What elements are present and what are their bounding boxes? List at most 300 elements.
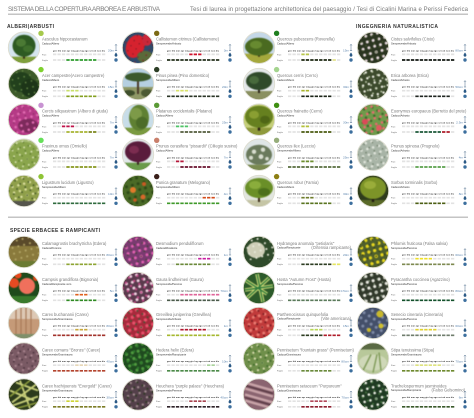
type: Sempreverde/Perenne [277,282,304,286]
phenology chart: gen feb mar apr mag giu lug ago set ott nov dic [288,193,341,196]
card: Heuchera purple palace [111,366,232,418]
phenology chart [391,254,455,266]
phenology chart: Foglie [156,203,163,205]
photo [356,138,390,171]
height icons: 1m [224,324,228,328]
phenology chart [391,121,455,134]
phenology chart [277,254,341,266]
name: Carex comans "Bronze" (Carex) [42,348,101,352]
height icons: 60cm [455,324,463,328]
height icons: 10m [108,192,114,196]
phenology chart [156,156,220,169]
phenology chart: Fiori [156,258,161,261]
card: Stipa tenuissima [357,342,467,374]
phenology chart: Foglie [42,96,49,98]
name: Parthenocissus quinquefolia [277,312,329,317]
phenology chart: Foglie [391,96,398,98]
name: Cercis siliquastrum (Albero di giuda) [42,109,108,114]
height icons: 70cm [341,396,349,400]
phenology chart: gen feb mar apr mag giu lug ago set ott nov dic [53,156,106,159]
phenology chart: gen feb mar apr mag giu lug ago set ott nov dic [288,254,341,257]
card: Quercus cerris [243,67,353,100]
phenology chart: Fiori [156,90,161,93]
name: Sorbus torminalis (Sorbo) [391,180,438,185]
phenology chart: Fiori [391,160,396,163]
photo [8,378,40,410]
phenology chart [277,396,341,409]
phenology chart: Foglie [156,167,163,169]
card: Quercus pubescens [243,31,353,64]
type: Caduco/Albero [277,114,295,118]
card: Acer campestre [8,66,118,100]
phenology chart: gen feb mar apr mag giu lug ago set ott nov dic [167,121,220,124]
height icons: 4m [224,192,228,196]
type: Sempreverde/Arbusto [156,42,182,46]
phenology chart: Fiori [156,125,161,128]
type: Caduco/Arbusto [391,185,410,189]
phenology chart: Fiori [42,364,47,367]
type: Sempreverde/Perenne [391,282,418,286]
phenology chart [391,325,455,337]
phenology chart: Fiori [391,329,396,332]
phenology chart: Foglie [277,371,284,373]
name: Calamagrostis brachytricha (Edera) [42,241,107,246]
photo [346,366,403,418]
phenology chart: gen feb mar apr mag giu lug ago set ott nov dic [53,193,106,196]
name: Punica granatum (Melograno) [156,180,211,185]
name: Fraxinus ornus (Orniello) [42,144,88,149]
dot [38,67,44,72]
phenology chart: Foglie [277,335,284,337]
card: Carex buchananii [8,307,118,339]
title: SISTEMA DELLA COPERTURA ARBOREA E ARBUSTIVA [8,6,161,13]
phenology chart [42,121,106,134]
phenology chart: gen feb mar apr mag giu lug ago set ott nov dic [167,360,220,363]
phenology chart [42,360,106,373]
type: Caduca/Graminacea [277,388,301,392]
photo [356,104,390,136]
phenology chart: gen feb mar apr mag giu lug ago set ott nov dic [402,396,455,399]
phenology chart [156,254,220,266]
name: Heuchera "purple palace" (Heuchera) [156,384,225,388]
card: Parthenocissus quinquefolia [232,294,353,352]
photo [111,259,168,317]
phenology chart [42,49,106,62]
height icons: 30m [343,192,349,196]
dot [274,174,279,179]
name: Quercus cerris (Cerro) [277,73,318,78]
type: Caduco/Albero [42,42,60,46]
card: Gaura lindheimeri [111,259,232,317]
height icons: 80cm [106,324,114,328]
phenology chart: gen feb mar apr mag giu lug ago set ott nov dic [402,121,455,124]
phenology chart [277,86,341,98]
name: Senecio cineraria (Cineraria) [391,312,444,317]
height icons: 7m [110,121,114,125]
phenology chart: Foglie [277,300,284,302]
phenology chart: Fiori [42,90,47,93]
height icons: 60cm [455,253,463,257]
photo [8,138,40,171]
phenology chart: Fiori [277,294,282,297]
name: Quercus frainetto (Cerro) [277,109,323,114]
photo [232,330,289,387]
phenology chart: Foglie [156,335,163,337]
type: Caduca/Perenne [42,246,62,250]
phenology chart: Foglie [42,407,49,409]
card: Ligustrum lucidum [8,174,118,208]
photo [111,294,168,352]
phenology chart: gen feb mar apr mag giu lug ago set ott nov dic [402,156,455,159]
phenology chart: Foglie [391,167,398,169]
phenology chart: Foglie [277,96,284,98]
name: Pinus pinea (Pino domestico) [156,73,210,78]
phenology chart [277,325,341,337]
type: Sempreverde/Graminacea [42,352,73,356]
height icons: 15m [343,324,349,328]
type: Sempreverde/Rampicante [156,352,187,356]
photo [243,175,275,207]
phenology chart: Foglie [277,60,284,62]
phenology chart [277,193,341,205]
phenology chart: Foglie [42,371,49,373]
type: Sempreverde/Albero [277,149,301,153]
dot [154,174,159,179]
card: Aesculus hippocastanum [8,31,118,65]
phenology chart [156,396,220,409]
dot [38,174,44,179]
credits: Tesi di laurea in progettazione architettonica del paesaggio / Tesi di Cicalini Marina e Perissi Federica [190,7,469,13]
phenology chart: Foglie [391,407,398,409]
card: Platanus occidentalis [122,103,232,136]
name: Ligustrum lucidum (Ligustro) [42,180,94,185]
name: Pennisetum "fountain grass" (Pennisetum) [277,348,354,352]
type: Sempreverde/Graminacea [391,352,422,356]
name: Stipa tenuissima (Stipa) [391,348,435,352]
card: Callistemon citrinus [122,30,232,64]
phenology chart: Fiori [277,364,282,367]
height icons: 2.5m [456,121,463,125]
photo [111,366,168,418]
phenology chart: Foglie [391,264,398,266]
height icons: 7m [110,156,114,160]
phenology chart: Fiori [156,400,161,403]
phenology chart: Foglie [391,300,398,302]
phenology chart: Fiori [156,364,161,367]
phenology chart: Foglie [391,371,398,373]
common name: (Falso Gelsomino) [432,387,466,392]
phenology chart [156,325,220,337]
photo [122,174,154,208]
phenology chart: gen feb mar apr mag giu lug ago set ott nov dic [288,156,341,159]
phenology chart: Fiori [391,400,396,403]
type: Caduco/Arbusto [391,114,410,118]
phenology chart: Fiori [391,125,396,128]
phenology chart: gen feb mar apr mag giu lug ago set ott nov dic [167,325,220,328]
type: Caduca/Ricadente [156,246,178,250]
photo [233,228,285,274]
photo [0,228,50,274]
phenology chart: Foglie [42,60,49,62]
card: Phlomis fruticosa [346,223,467,281]
name: Phlomis fruticosa (Falsa salvia) [391,241,448,246]
type: Sempreverde/Perenne [391,246,418,250]
card: Trachelospermum jasminoides [346,366,467,418]
name: Callistemon citrinus (Callistemone) [156,37,220,42]
height icons: 80cm [341,360,349,364]
phenology chart: Fiori [156,294,161,297]
name: Hosta "Autumn Frost" (Hosta) [277,277,332,282]
phenology chart [391,49,455,62]
card: Hosta Autumn Frost [243,272,353,304]
photo [8,307,40,339]
phenology chart: Fiori [391,294,396,297]
card: Desmodium penduliflorum [111,223,232,281]
phenology chart: gen feb mar apr mag giu lug ago set ott nov dic [402,290,455,293]
phenology chart: Fiori [277,400,282,403]
phenology chart: Fiori [391,258,396,261]
phenology chart [391,193,455,205]
card: Prunus cerasifera [122,138,238,171]
height icons: 80cm [106,253,114,257]
phenology chart [277,121,341,134]
phenology chart: Foglie [42,167,49,169]
heading: alberi arbusti: ALBERI|ARBUSTI [7,24,55,30]
phenology chart [42,290,106,302]
photo [243,272,275,304]
phenology chart: Foglie [42,300,49,302]
dot [274,103,279,108]
card: Punica granatum [122,174,232,208]
name: Carex hachijoensis "Evergold" (Carex) [42,384,112,388]
height icons: 20m [343,253,349,257]
phenology chart [156,290,220,302]
photo [243,378,275,410]
card: Calamagrostis brachytricha [0,228,118,274]
height icons: 80cm [455,289,463,293]
name: Quercus robur (Farnia) [277,180,319,185]
type: Caduco/Arbusto [391,149,410,153]
height icons: 15m [108,85,114,89]
height icons: 1m [224,253,228,257]
type: Sempreverde/Perenne [156,282,183,286]
height icons: 15m [343,49,349,53]
phenology chart: Foglie [391,60,398,62]
type: Caduco/Albero [277,78,295,82]
phenology chart: gen feb mar apr mag giu lug ago set ott nov dic [53,86,106,89]
phenology chart [42,156,106,169]
name: Carex buchananii (Carex) [42,312,89,317]
phenology chart: Foglie [277,167,284,169]
phenology chart: Foglie [277,407,284,409]
phenology chart: Fiori [391,53,396,56]
type: Caduca/Rampicante [277,317,301,321]
type: Sempreverde/Rampicante [391,388,422,392]
height icons: 4m [459,156,463,160]
type: Sempreverde/Arbusto [391,42,417,46]
phenology chart: Fiori [277,53,282,56]
card: Fraxinus ornus [8,138,118,171]
photo [0,330,54,387]
phenology chart: Foglie [42,335,49,337]
phenology chart: Fiori [156,53,161,56]
phenology chart: Fiori [277,90,282,93]
phenology chart: gen feb mar apr mag giu lug ago set ott nov dic [288,325,341,328]
card: Euonymus europaeus [356,104,467,136]
photo [122,104,154,136]
type: Sempreverde/Arbusto [156,317,182,321]
phenology chart: Fiori [42,53,47,56]
heading: specie erbacee e rampicanti: SPECIE ERBACEE E RAMPICANTI [10,228,101,234]
phenology chart: Fiori [277,258,282,261]
name: Trachelospermum jasminoides [391,384,447,388]
phenology chart: Foglie [42,203,49,205]
type: Caduco/Albero [277,185,295,189]
phenology chart: Fiori [277,125,282,128]
card: Erica arborea [356,68,467,100]
phenology chart: gen feb mar apr mag giu lug ago set ott nov dic [167,193,220,196]
card: Pyracantha coccinea [346,259,467,317]
phenology chart: gen feb mar apr mag giu lug ago set ott nov dic [402,193,455,196]
photo [122,32,154,64]
phenology chart [391,156,455,169]
phenology chart: gen feb mar apr mag giu lug ago set ott nov dic [53,49,106,52]
dot [154,31,159,36]
common name: (Ortensia rampicante) [311,245,352,250]
phenology chart [391,290,455,302]
dot [154,67,159,72]
photo [356,32,390,64]
card: Quercus frainetto [243,103,353,136]
phenology chart: gen feb mar apr mag giu lug ago set ott nov dic [288,49,341,52]
height icons: 80cm [455,49,463,53]
type: Caduca/Rampicante [277,246,301,250]
card: Quercus ilex [243,138,353,171]
dot [38,103,44,108]
height icons: 7m [224,156,228,160]
card: Cercis siliquastrum [8,102,118,136]
phenology chart: gen feb mar apr mag giu lug ago set ott nov dic [167,156,220,159]
height icons: 3m [224,49,228,53]
phenology chart [156,86,220,98]
type: Caduco/Albero [277,42,295,46]
phenology chart: Fiori [42,197,47,200]
name: Platanus occidentalis (Platano) [156,109,213,114]
phenology chart: Foglie [42,132,49,134]
phenology chart: Foglie [391,132,398,134]
type: Caduca/Graminacea [277,352,301,356]
photo [8,68,40,100]
name: Prunus spinosa (Prugnolo) [391,144,440,149]
heading: ingegneria naturalistica: INGEGNERIA NATURALISTICA [356,24,438,30]
name: Hedera helix (Edera) [156,348,194,352]
type: Caduco/Albero [42,114,60,118]
phenology chart: gen feb mar apr mag giu lug ago set ott nov dic [402,325,455,328]
type: Sempreverde/Graminacea [42,317,73,321]
phenology chart [42,86,106,98]
photo [357,342,389,374]
photo [122,68,154,100]
phenology chart: Fiori [391,364,396,367]
phenology chart: gen feb mar apr mag giu lug ago set ott nov dic [167,49,220,52]
height icons: 70cm [455,360,463,364]
type: Caduca/Rampicante vero [42,282,72,286]
phenology chart [391,86,455,98]
photo [8,174,40,208]
dot [154,138,159,143]
type: Sempreverde/Albero [42,185,66,189]
photo [243,32,275,64]
phenology chart: Foglie [277,203,284,205]
name: Cistus salvifolius (Cisto) [391,37,435,42]
card: Campsis grandiflora [8,272,118,304]
card: Hydrangea anomala petiolaris [233,228,353,274]
photo [111,330,168,387]
phenology chart: Fiori [42,400,47,403]
name: Grevillea juniperina (Grevillea) [156,312,212,317]
phenology chart: Foglie [156,264,163,266]
card: Grevillea juniperina [111,294,232,352]
phenology chart: Foglie [156,96,163,98]
height icons: 50cm [455,85,463,89]
phenology chart [156,49,220,62]
card: Prunus spinosa [356,138,467,171]
phenology chart [156,360,220,373]
height icons: 40cm [106,360,114,364]
dot [274,67,279,72]
phenology chart: gen feb mar apr mag giu lug ago set ott nov dic [53,396,106,399]
height icons: 25m [222,121,228,125]
phenology chart: gen feb mar apr mag giu lug ago set ott nov dic [167,86,220,89]
phenology chart: gen feb mar apr mag giu lug ago set ott nov dic [53,325,106,328]
name: Euonymus europaeus (Berretto del prete) [391,109,467,114]
phenology chart [277,360,341,373]
phenology chart: gen feb mar apr mag giu lug ago set ott nov dic [288,290,341,293]
phenology chart: gen feb mar apr mag giu lug ago set ott nov dic [167,254,220,257]
name: Quercus pubescens (Roverella) [277,37,335,42]
phenology chart: gen feb mar apr mag giu lug ago set ott nov dic [53,290,106,293]
photo [8,104,40,136]
phenology chart: Foglie [42,264,49,266]
card: Hedera helix [111,330,232,387]
phenology chart [277,156,341,169]
phenology chart [277,49,341,62]
phenology chart [156,121,220,134]
type: Caduco/Albero [42,78,60,82]
photo [346,259,403,317]
phenology chart [391,360,455,373]
phenology chart: gen feb mar apr mag giu lug ago set ott nov dic [288,121,341,124]
height icons: 5m [110,289,114,293]
photo [243,139,275,171]
height icons: 6m [459,396,463,400]
phenology chart: Fiori [156,197,161,200]
dot [38,31,44,36]
phenology chart: gen feb mar apr mag giu lug ago set ott nov dic [53,360,106,363]
photo [243,68,275,100]
phenology chart: Foglie [391,203,398,205]
type: Sempreverde/Perenne [391,317,418,321]
phenology chart: gen feb mar apr mag giu lug ago set ott nov dic [167,290,220,293]
type: Sempreverde/Albero [156,185,180,189]
phenology chart: gen feb mar apr mag giu lug ago set ott nov dic [167,396,220,399]
name: Campsis grandiflora (Bignonia) [42,277,99,282]
name: Hydrangea anomala "petiolaris" [277,241,335,246]
card: Quercus robur [243,174,353,207]
phenology chart: Fiori [277,197,282,200]
photo [356,68,390,100]
common name: (Vite americana) [321,316,352,321]
